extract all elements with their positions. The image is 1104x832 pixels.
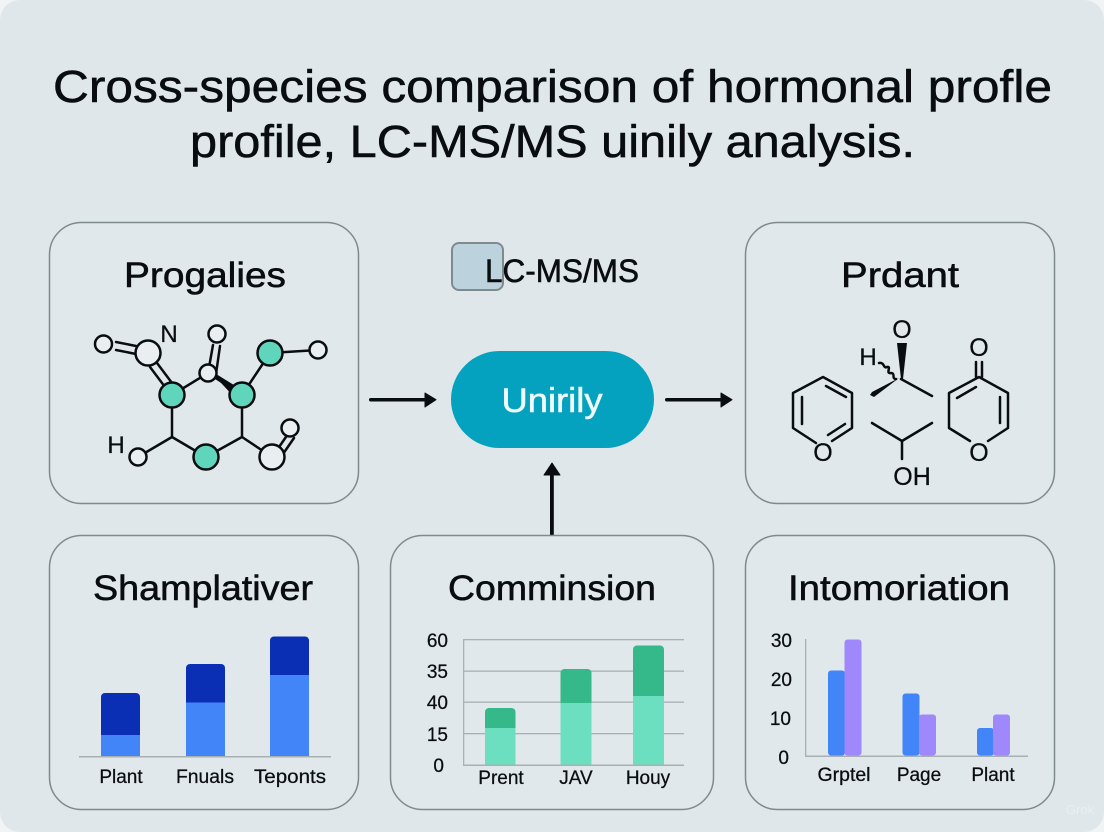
LC-MS/MS label with icon xyxy=(452,243,639,290)
stacked bar chart: green: 40 xyxy=(427,693,448,714)
heading: Progalies: Progalies xyxy=(124,256,286,295)
heading: Prdant: Prdant xyxy=(841,256,959,295)
stacked bar chart: green: Houy xyxy=(626,768,671,789)
icon: square xyxy=(452,243,503,290)
stacked bar chart: blue: Teponts xyxy=(254,767,326,788)
central pill: Unirily xyxy=(451,351,654,448)
grouped bar chart: 30 xyxy=(771,631,792,652)
stacked bar chart: blue: Fnuals xyxy=(176,767,234,788)
molecule diagram: right: O xyxy=(969,439,989,467)
stacked bar chart: blue: Plant xyxy=(99,767,143,788)
molecule diagram: left: H xyxy=(107,432,125,459)
molecule diagram: right xyxy=(793,316,1008,491)
molecule diagram: right: O xyxy=(892,316,912,344)
stacked bar chart: green: JAV xyxy=(559,768,593,789)
molecule diagram: right: O xyxy=(813,439,833,467)
stacked bar chart: blue xyxy=(79,636,331,788)
molecule diagram: right: H xyxy=(859,344,877,371)
molecule diagram: right: OH xyxy=(893,463,931,491)
stacked bar chart: green: Prent xyxy=(478,768,524,789)
LC-MS/MS label with icon: LC-MS/MS xyxy=(485,253,639,289)
title: Cross-species comparison of hormonal profle xyxy=(53,61,1052,112)
title: profile, LC-MS/MS uinily analysis. xyxy=(190,116,915,167)
heading: Shamplativer: Shamplativer xyxy=(93,569,313,608)
stacked bar chart: green: 35 xyxy=(427,662,448,683)
grouped bar chart: Grptel xyxy=(818,765,870,786)
stacked bar chart: green: 60 xyxy=(427,631,448,652)
grouped bar chart: Plant xyxy=(971,765,1015,786)
arrow: left panel to pill xyxy=(369,393,436,407)
grouped bar chart: Page xyxy=(897,765,941,786)
panel: Intomoriation xyxy=(746,536,1054,810)
molecule diagram: left xyxy=(95,321,326,470)
panel: Comminsion xyxy=(390,536,714,810)
molecule diagram: left: N xyxy=(160,321,178,348)
panel: Prdant xyxy=(746,222,1054,504)
watermark: Grok xyxy=(1066,802,1095,817)
central pill: Unirily: Unirily xyxy=(502,382,602,420)
panel: Progalies xyxy=(50,222,358,504)
stacked bar chart: green: 15 xyxy=(427,725,448,746)
arrow: pill to right panel xyxy=(665,393,732,407)
molecule diagram: right: O xyxy=(969,334,989,362)
grouped bar chart: 20 xyxy=(771,670,792,691)
grouped bar chart xyxy=(770,631,1028,786)
stacked bar chart: green: 0 xyxy=(433,756,444,777)
grouped bar chart: 0 xyxy=(778,748,789,769)
title xyxy=(53,61,1052,167)
heading: Comminsion: Comminsion xyxy=(448,569,656,608)
heading: Intomoriation: Intomoriation xyxy=(788,569,1010,608)
panel: Shamplativer xyxy=(50,536,358,810)
grouped bar chart: 10 xyxy=(770,709,791,730)
arrow: bottom panel to pill xyxy=(544,463,560,536)
stacked bar chart: green xyxy=(427,631,684,789)
